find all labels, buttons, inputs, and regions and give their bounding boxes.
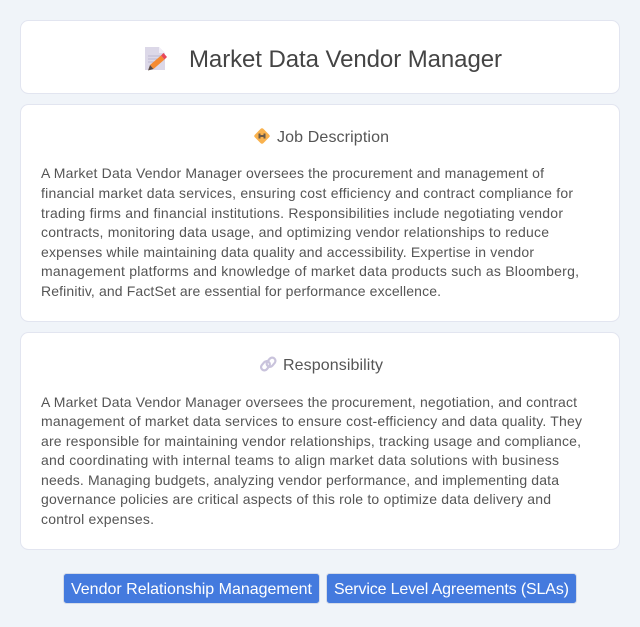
tag: service level agreements: Service Level Agreements (SLAs)	[334, 581, 569, 598]
text block: job description: A Market Data Vendor Manager oversees the procurement and management of	[41, 165, 544, 181]
text block: responsibility: governance policies are critical aspects of this role to optimize data delivery and	[41, 491, 551, 507]
panel: title card	[20, 20, 620, 94]
tag: service level agreements	[326, 574, 576, 604]
tag: vendor relationship management	[64, 574, 320, 604]
title: Market Data Vendor Manager	[189, 46, 502, 73]
tag: vendor relationship management: Vendor Relationship Management	[71, 581, 313, 598]
text block: job description: expenses while maintaining data quality and accessibility. Expertise in vendor	[41, 244, 534, 260]
panel: responsibility	[20, 332, 620, 550]
heading: responsibility: Responsibility	[283, 357, 383, 374]
text block: responsibility: are responsible for maintaining vendor relationships, tracking usage and compliance,	[41, 433, 581, 449]
text block: job description: Refinitiv, and FactSet are essential for performance excellence.	[41, 283, 441, 299]
text block: responsibility: and coordinating with internal teams to align market data solutions with business	[41, 452, 559, 468]
heading: job description: Job Description	[277, 129, 389, 146]
icon: diamond badge	[254, 128, 270, 144]
icon: document with pencil	[145, 47, 167, 70]
icon: link	[260, 356, 277, 372]
text block: job description	[41, 165, 579, 299]
text block: responsibility: management of market data services to ensure cost-efficiency and data quality. They	[41, 413, 582, 429]
text block: responsibility	[41, 394, 582, 527]
text block: responsibility: control expenses.	[41, 511, 154, 527]
text block: job description: contracts, monitoring data usage, and optimizing vendor relationships to reduce	[41, 224, 549, 240]
text block: job description: financial market data services, ensuring cost efficiency and contract compliance for	[41, 185, 573, 201]
panel: job description	[20, 104, 620, 322]
text block: job description: management platforms and knowledge of market data products such as Bloomberg,	[41, 263, 579, 279]
text block: job description: trading firms and financial institutions. Responsibilities include negotiating vendor	[41, 205, 563, 221]
text block: responsibility: needs. Managing budgets, analyzing vendor performance, and implementing data	[41, 472, 559, 488]
text block: responsibility: A Market Data Vendor Manager oversees the procurement, negotiation, and contract	[41, 394, 577, 410]
